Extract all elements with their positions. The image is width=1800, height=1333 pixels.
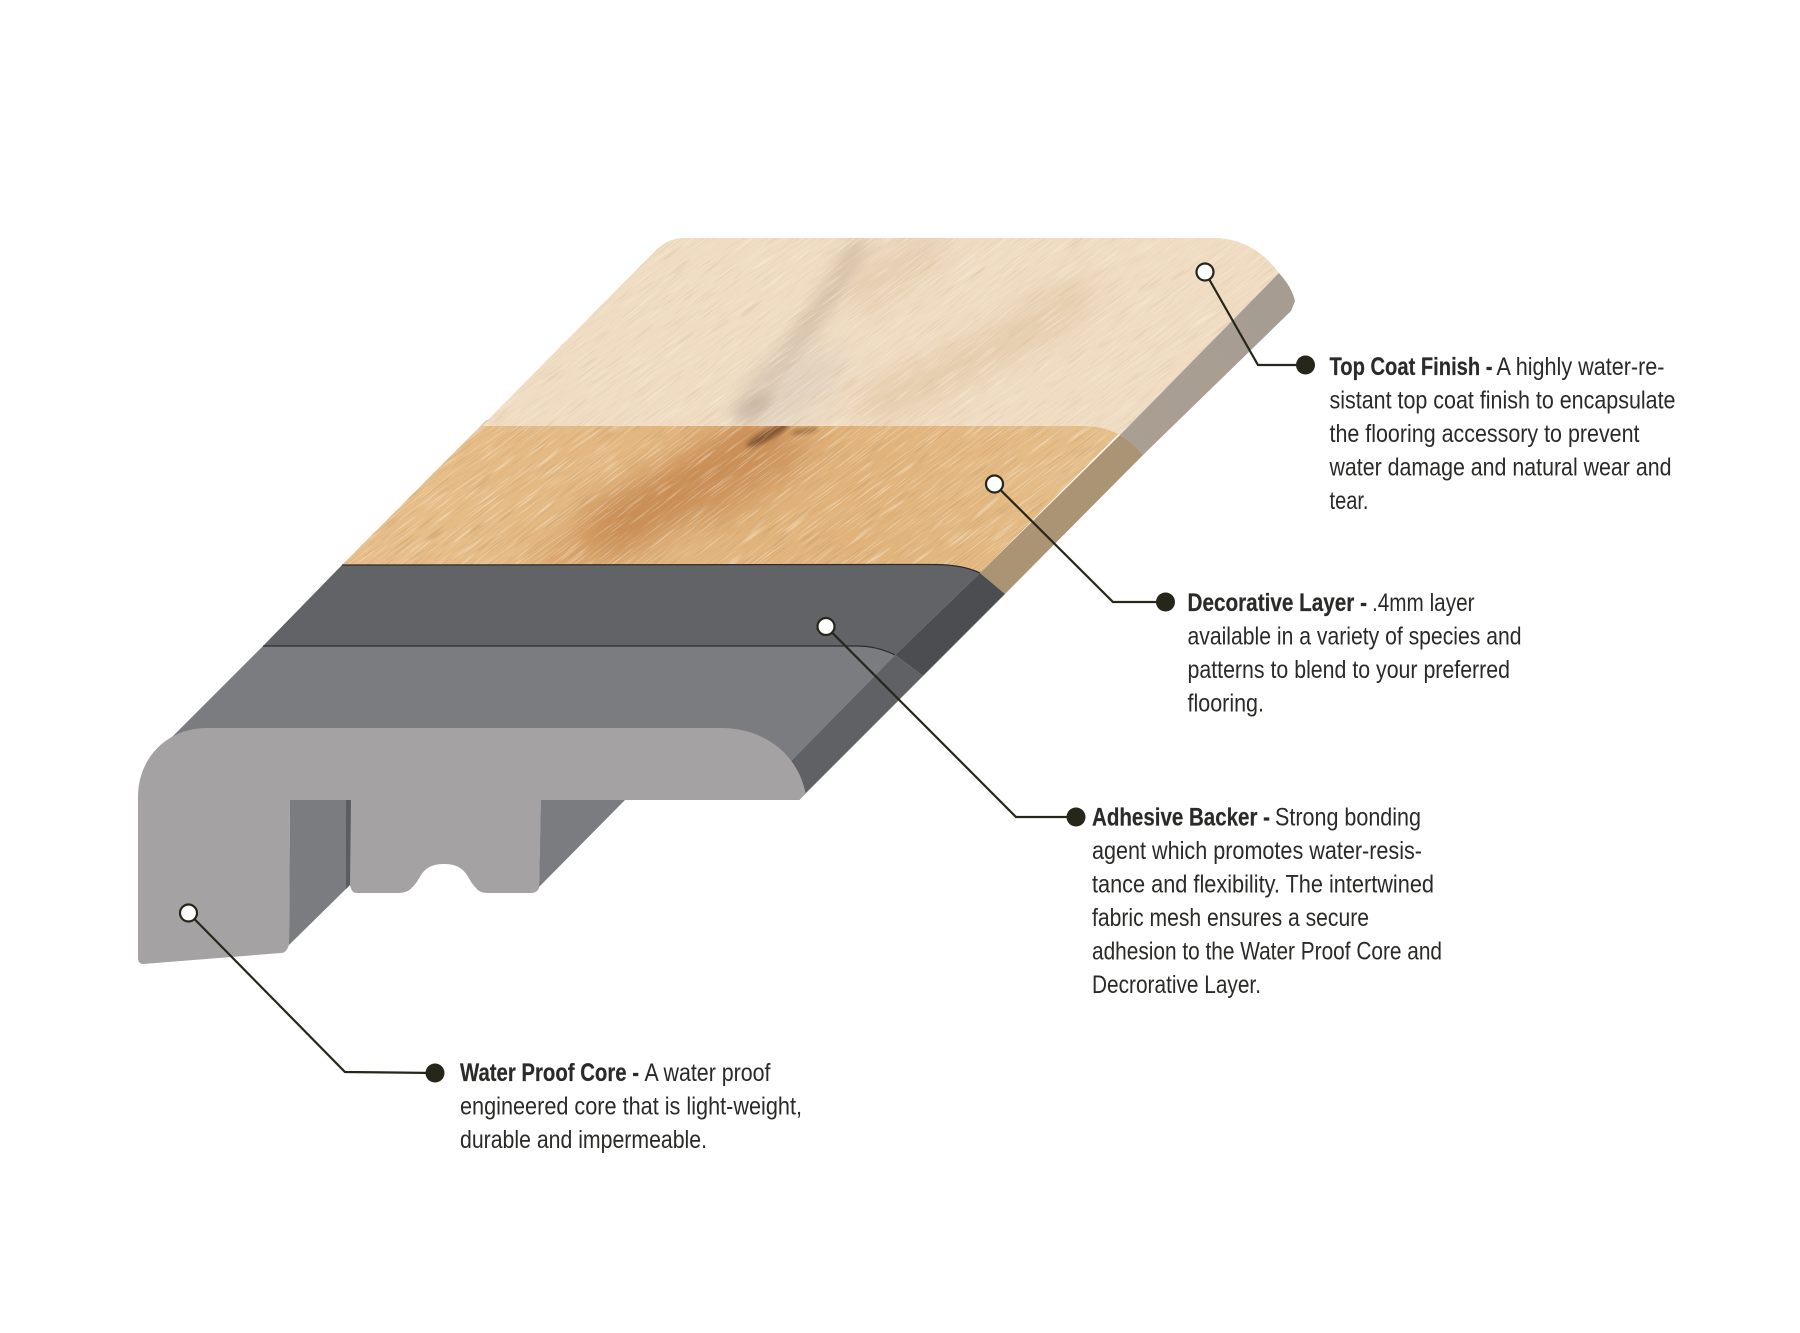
marker: white point — [1196, 264, 1214, 280]
text block: Water Proof Core - — [460, 1059, 639, 1087]
water proof core side bevel — [780, 655, 923, 800]
callout: top coat finish — [1196, 264, 1676, 515]
marker: black dot — [426, 1064, 444, 1082]
marker: white point — [986, 476, 1003, 492]
callout: decorative layer — [986, 476, 1522, 718]
decorative layer wood surface — [342, 238, 1279, 573]
callout: adhesive backer — [818, 618, 1442, 999]
water proof core top surface — [164, 646, 895, 770]
leader line — [826, 626, 1076, 817]
text block: Decorative Layer - — [1188, 589, 1367, 617]
marker: black dot — [1066, 808, 1086, 826]
callout: water proof core — [180, 904, 802, 1154]
text block — [1329, 353, 1676, 515]
text block: Strong bonding — [1275, 804, 1421, 832]
text block: water damage and natural wear and — [1329, 454, 1672, 482]
water proof core end profile — [138, 728, 806, 964]
text block: available in a variety of species and — [1188, 622, 1522, 650]
adhesive backer surface — [263, 564, 980, 655]
marker: black dot — [1296, 356, 1315, 374]
text block: Top Coat Finish - — [1330, 353, 1492, 381]
text block: .4mm layer — [1372, 589, 1474, 617]
adhesive backer side bevel — [895, 573, 1005, 676]
text block: Adhesive Backer - — [1092, 804, 1270, 832]
marker: white point — [818, 618, 834, 635]
text block: Decrorative Layer. — [1092, 971, 1261, 999]
text block: flooring. — [1188, 690, 1264, 718]
text block: adhesion to the Water Proof Core and — [1092, 938, 1442, 966]
text block: agent which promotes water-resis- — [1092, 837, 1422, 865]
layer seam lines — [263, 564, 980, 655]
text block: sistant top coat finish to encapsulate — [1330, 386, 1676, 414]
text block: tear. — [1330, 487, 1368, 515]
text block — [1092, 804, 1442, 999]
text block: patterns to blend to your preferred — [1188, 656, 1510, 684]
text block: tance and flexibility. The intertwined — [1092, 870, 1434, 898]
text block — [1188, 589, 1522, 718]
decorative layer side bevel — [980, 435, 1143, 594]
text block: A water proof — [644, 1059, 771, 1087]
leader line — [1205, 272, 1305, 365]
text block: A highly water-re- — [1496, 353, 1664, 381]
infographic canvas — [138, 238, 1674, 1153]
text block: fabric mesh ensures a secure — [1092, 904, 1369, 932]
text block — [460, 1059, 802, 1154]
leader line — [994, 484, 1165, 602]
top coat side bevel — [1120, 273, 1295, 455]
leader line — [188, 913, 435, 1073]
text block: the flooring accessory to prevent — [1330, 420, 1640, 448]
top coat finish surface — [482, 238, 1279, 435]
flooring accessory cutaway illustration — [138, 238, 1295, 964]
text block: engineered core that is light-weight, — [460, 1092, 802, 1120]
marker: black dot — [1156, 592, 1175, 612]
text block: durable and impermeable. — [460, 1126, 707, 1154]
underside groove shading — [289, 790, 635, 945]
marker: white point — [180, 904, 197, 922]
